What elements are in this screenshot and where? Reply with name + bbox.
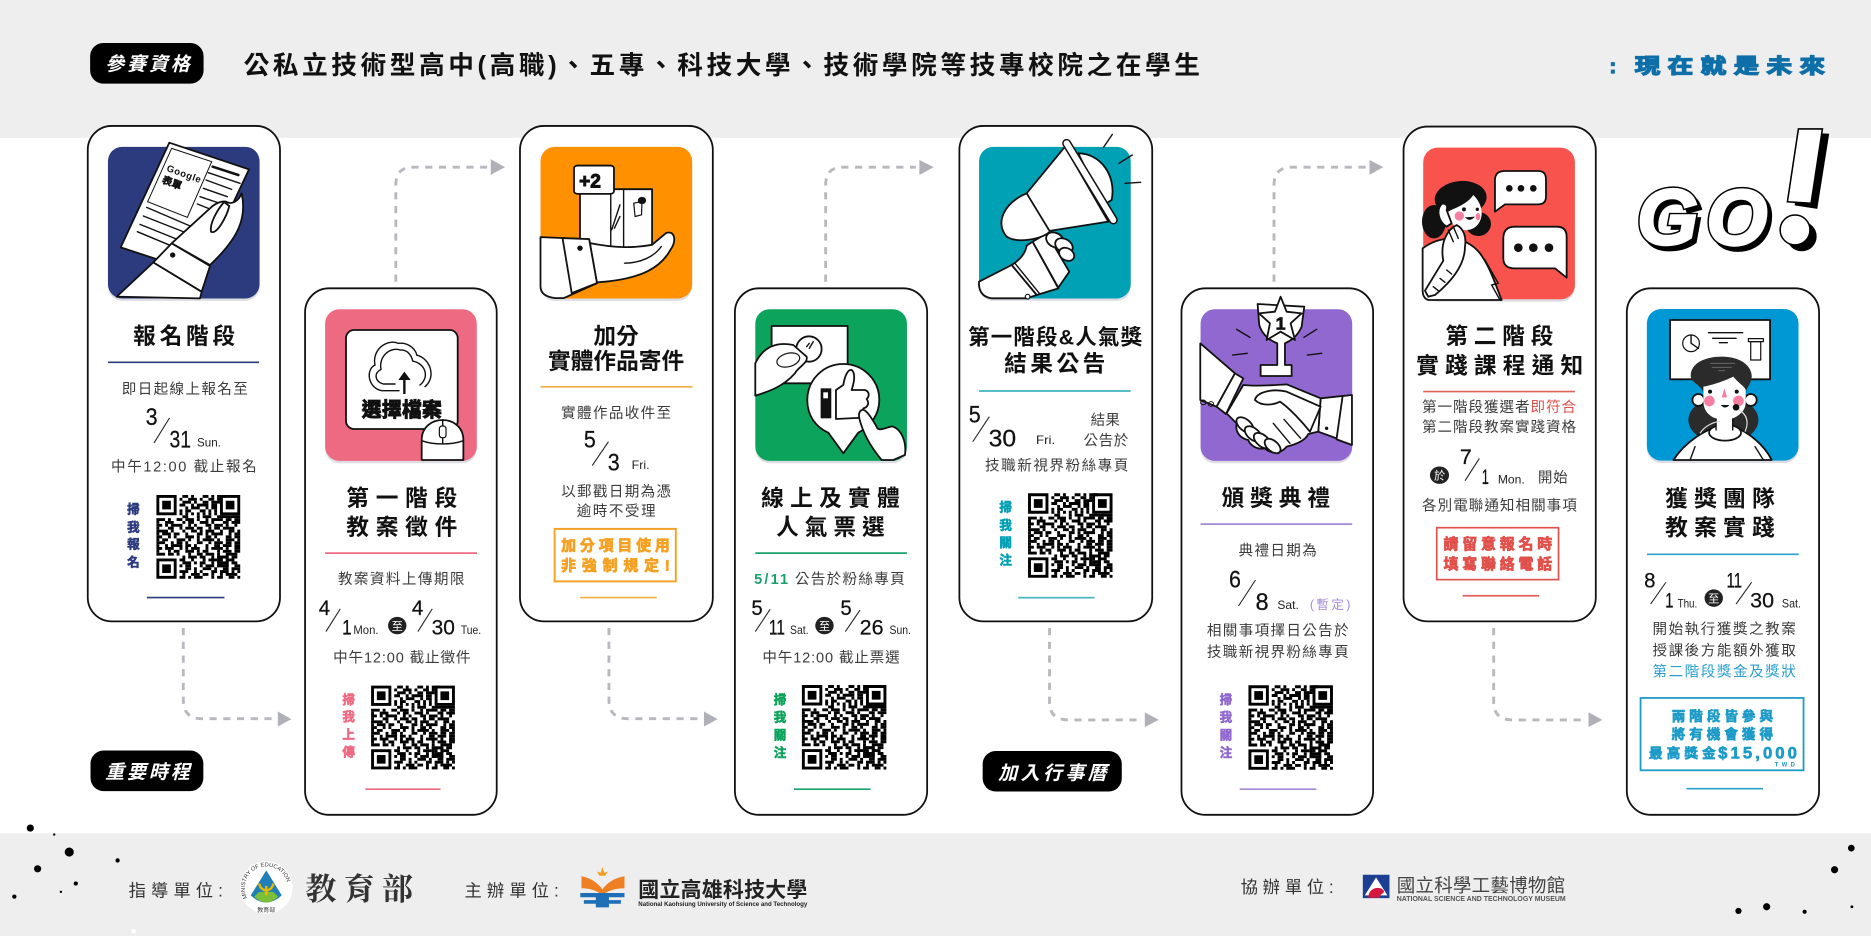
description: 各別電聯通知相關事項 — [1422, 497, 1577, 514]
step title: 報名階段 — [133, 323, 236, 349]
graphic: GO! lettering: O — [1710, 177, 1771, 265]
note: 以郵戳日期為憑 — [561, 484, 671, 501]
icon: hand holding Google form — [108, 143, 260, 301]
date range: 5/11 to 5/26 — [751, 596, 911, 640]
scan me label — [127, 501, 140, 569]
scan me label: 關 — [774, 729, 786, 743]
panel: step 6 award ceremony — [1181, 288, 1373, 815]
date range: 8/1 to 11/30: Thu. — [1678, 597, 1697, 611]
badge: add to calendar: 加入行事曆 — [998, 763, 1111, 785]
graphic: GO! lettering: G — [1637, 174, 1698, 262]
step title — [1416, 323, 1583, 378]
scan me label — [774, 692, 787, 760]
step title: 結果公告 — [1004, 350, 1105, 376]
scan me label: 我 — [342, 710, 355, 724]
note — [1207, 623, 1349, 661]
panel: step 8 winners teaching — [1627, 288, 1819, 815]
description: 即日起線上報名至 — [122, 381, 248, 398]
QR code: follow — [1028, 493, 1113, 578]
logo: Ministry of Education: 教育部 — [257, 906, 275, 914]
date: 7/1: 7 — [1460, 445, 1472, 469]
callout: bonus optional — [555, 529, 676, 581]
icon: hand holding Google form: Google — [165, 163, 202, 186]
card frame — [1404, 127, 1596, 621]
step title: 教案徵件 — [346, 514, 457, 540]
deadline: 中午12:00 截止徵件 — [333, 650, 470, 667]
date: 5/3 — [584, 427, 650, 476]
date range: 5/11 to 5/26: 11 — [769, 616, 785, 640]
date range: 5/11 to 5/26: Sat. — [790, 623, 809, 637]
badge: eligibility: 參賽資格 — [105, 53, 192, 75]
step title: 第一階段&人氣獎 — [968, 324, 1142, 349]
panel: step 4 popularity vote — [735, 288, 927, 815]
footer: advisor label: 指導單位: — [129, 881, 223, 901]
scan me label: 名 — [127, 554, 140, 569]
graphic: GO! lettering — [1637, 129, 1829, 265]
description — [985, 412, 1129, 474]
header band — [0, 0, 1871, 138]
date range: 4/1 to 4/30: 4 — [412, 596, 423, 620]
arrow: step 1 to 2 — [183, 628, 291, 726]
date: 5/30 — [969, 402, 1055, 453]
step title: 第二階段 — [1445, 323, 1554, 349]
QR code: follow — [802, 685, 886, 770]
scan me label — [342, 692, 355, 759]
description: 授課後方能額外獲取 — [1652, 642, 1796, 659]
step title: 線上及實體 — [761, 485, 900, 511]
icon: hand holding parcels +2 — [540, 147, 692, 301]
date range: 8/1 to 11/30: 1 — [1665, 589, 1674, 613]
icon: hand holding Google form: 表單 — [160, 173, 184, 192]
heading: eligibility statement: 公私立技術型高中(高職)、五專、科技大學、技術學院等技專校院之在學生 — [244, 50, 1200, 80]
scan me label: 我 — [127, 520, 140, 534]
date range: 5/11 to 5/26: 26 — [860, 616, 884, 640]
panel: step 2 lesson plan submission — [305, 288, 497, 815]
eligibility note — [1422, 398, 1577, 436]
description: 第二階段獎金及獎狀 — [1652, 662, 1796, 680]
tagline: 現在就是未來 — [1635, 54, 1825, 77]
date: 7/1: 1 — [1482, 465, 1489, 489]
step title: 教案實踐 — [1665, 514, 1775, 540]
date range: 8/1 to 11/30: 11 — [1727, 568, 1742, 592]
badge: add to calendar — [983, 751, 1122, 792]
logo: Ministry of Education: MINISTRY OF EDUCATION — [240, 862, 291, 899]
announcement — [754, 571, 905, 588]
footer: decorative dots right — [1735, 845, 1855, 914]
step title — [968, 324, 1142, 376]
date range: 4/1 to 4/30: 至 — [392, 621, 403, 633]
badge: eligibility — [90, 43, 204, 84]
deadline: 中午12:00 截止票選 — [762, 650, 900, 667]
step title: 頒獎典禮 — [1221, 485, 1330, 511]
scan me label: 掃 — [342, 692, 355, 707]
icon: woman presenter with headset — [1647, 309, 1799, 463]
date range: 8/1 to 11/30: 8 — [1644, 568, 1656, 592]
callout: bonus optional: 非強制規定! — [561, 557, 670, 575]
note: 逾時不受理 — [577, 503, 656, 520]
scan me label: 掃 — [127, 501, 140, 516]
date: 5/30: Fri. — [1036, 433, 1055, 447]
scan me label: 掃 — [774, 692, 786, 707]
date: 6/8: Sat. — [1277, 598, 1299, 612]
date: 7/1: 於 — [1434, 468, 1445, 482]
step title: 加分 — [593, 323, 639, 349]
step title: 人氣票選 — [776, 514, 885, 540]
date range: 4/1 to 4/30: Tue. — [461, 623, 481, 637]
date: 6/8 — [1229, 566, 1350, 616]
panel: step 5 results announcement — [959, 126, 1152, 621]
callout: top prize: TWD — [1775, 762, 1796, 768]
scan me label: 注 — [999, 553, 1012, 568]
QR code: register — [156, 495, 240, 579]
description: 結果 — [1091, 412, 1120, 429]
date: 3/31: 3 — [146, 404, 158, 431]
footer band — [0, 833, 1871, 936]
date: 6/8: 8 — [1255, 589, 1269, 616]
date: 6/8: (暫定) — [1310, 598, 1350, 612]
scan me label — [1220, 692, 1233, 760]
scan me label: 我 — [774, 711, 787, 725]
date range: 4/1 to 4/30: 1 — [342, 616, 352, 640]
date range: 5/11 to 5/26: 5 — [751, 596, 763, 620]
description — [1652, 621, 1796, 680]
panel: step 1 registration — [88, 126, 280, 621]
description: 公告於 — [1084, 432, 1129, 449]
callout: top prize — [1641, 698, 1804, 770]
description: 實體作品收件至 — [561, 404, 671, 422]
date range: 8/1 to 11/30: 30 — [1750, 589, 1774, 613]
date: 5/30: 5 — [969, 402, 981, 429]
scan me label: 掃 — [1220, 692, 1232, 707]
description: 開始執行獲獎之教案 — [1652, 621, 1796, 638]
date: 5/3: 5 — [584, 427, 596, 454]
badge: important dates: 重要時程 — [105, 761, 193, 783]
step title: 實踐課程通知 — [1416, 352, 1583, 378]
graphic: GO! lettering: O — [1706, 174, 1768, 262]
arrow: step 5 to 6 — [1050, 628, 1159, 727]
description: 技職新視界粉絲專頁 — [985, 457, 1128, 474]
date: 7/1 — [1430, 445, 1568, 489]
step title: 第一階段 — [346, 485, 458, 511]
QR code: upload — [371, 686, 455, 769]
scan me label: 我 — [999, 518, 1012, 532]
note: 相關事項擇日公告於 — [1207, 623, 1349, 640]
callout: phone number reminder: 填寫聯絡電話 — [1444, 555, 1552, 573]
logo text: museum: 國立科學工藝博物館 — [1397, 875, 1565, 896]
scan me label: 關 — [999, 536, 1012, 550]
scan me label: 我 — [1220, 711, 1233, 725]
date: 5/3: 3 — [608, 449, 620, 476]
icon: trophy and handshake: 1 — [1276, 314, 1286, 334]
arrow: step 4 to 5 — [826, 160, 934, 282]
icon: upload file window: 選擇檔案 — [362, 399, 442, 422]
deadline: 中午12:00 截止報名 — [111, 459, 257, 476]
note: 技職新視界粉絲專頁 — [1207, 644, 1349, 661]
callout: bonus optional: 加分項目使用 — [561, 536, 670, 554]
icon: hands and thumbs up — [755, 309, 907, 463]
date: 3/31: Sun. — [197, 436, 221, 450]
logo: National Science and Technology Museum — [1363, 875, 1389, 898]
card frame — [305, 288, 497, 815]
logo: Ministry of Education — [240, 862, 292, 914]
scan me label: 注 — [1220, 745, 1233, 760]
date: 7/1: Mon. — [1498, 473, 1525, 487]
eligibility note: 第一階段獲選者即符合 — [1422, 398, 1577, 416]
scan me label: 關 — [1220, 729, 1232, 743]
date: 3/31: 31 — [170, 427, 191, 454]
logo text: NKUST: 國立高雄科技大學 — [638, 878, 807, 902]
date range: 5/11 to 5/26: 至 — [819, 621, 830, 633]
step title — [1665, 486, 1775, 540]
scan me label — [999, 500, 1012, 568]
footer: decorative dots left — [12, 824, 136, 934]
step title: 實體作品寄件 — [548, 348, 684, 374]
panel: step 7 second stage notice — [1404, 127, 1596, 621]
date: 7/1: 開始 — [1538, 469, 1568, 486]
announcement: 5/11 — [754, 572, 788, 588]
icon: trophy and handshake — [1200, 297, 1352, 463]
logo: NKUST — [580, 867, 624, 907]
date range: 4/1 to 4/30: 4 — [319, 596, 330, 620]
announcement: 公告於粉絲專頁 — [795, 571, 905, 588]
date: 5/30: 30 — [989, 426, 1016, 453]
card frame — [735, 288, 927, 815]
description: 典禮日期為 — [1239, 543, 1317, 560]
date range: 4/1 to 4/30: 30 — [432, 616, 455, 640]
callout: top prize: $15,000 — [1718, 744, 1797, 763]
panel: step 3 bonus physical work — [520, 126, 713, 621]
arrow: step 7 to 8 — [1494, 628, 1602, 727]
date range: 8/1 to 11/30: 至 — [1708, 593, 1719, 605]
scan me label: 注 — [774, 745, 787, 760]
scan me label: 上 — [342, 728, 355, 742]
scan me label: 掃 — [999, 500, 1012, 515]
note — [561, 484, 671, 520]
logo text: museum: NATIONAL SCIENCE AND TECHNOLOGY MUSEUM — [1397, 894, 1566, 903]
date range: 4/1 to 4/30 — [319, 596, 481, 640]
step title — [761, 485, 900, 540]
card frame — [520, 126, 713, 621]
step title — [548, 323, 684, 374]
date range: 4/1 to 4/30: Mon. — [353, 623, 378, 637]
callout: phone number reminder: 請留意報名時 — [1444, 535, 1552, 553]
description: 教案資料上傳期限 — [338, 571, 465, 588]
card frame — [1181, 288, 1373, 815]
icon: woman on the phone — [1422, 148, 1575, 302]
callout: top prize: 將有機會獲得 — [1672, 726, 1773, 742]
date: 6/8: 6 — [1229, 566, 1241, 593]
logo text: Ministry of Education: 教育部 — [305, 872, 413, 907]
arrow: step 3 to 4 — [609, 628, 718, 726]
card frame — [88, 126, 280, 621]
QR code: follow — [1248, 685, 1333, 770]
arrow: step 6 to 7 — [1274, 160, 1383, 282]
eligibility note: 第二階段教案實踐資格 — [1422, 418, 1577, 436]
scan me label: 報 — [127, 537, 140, 552]
tagline: : — [1610, 56, 1616, 78]
footer: organizer label: 主辦單位: — [464, 881, 559, 901]
card frame — [959, 126, 1152, 621]
date range: 8/1 to 11/30 — [1644, 568, 1801, 613]
icon: megaphone — [979, 134, 1141, 301]
graphic: GO! lettering: G — [1637, 174, 1698, 262]
icon: hand holding parcels +2: +2 — [579, 171, 601, 192]
callout: top prize: 最高獎金 — [1649, 745, 1716, 761]
date range: 5/11 to 5/26: Sun. — [890, 623, 911, 637]
icon: upload file window — [325, 309, 477, 463]
callout: phone number reminder — [1437, 528, 1559, 580]
footer: co-organizer label: 協辦單位: — [1241, 877, 1334, 897]
arrow: step 2 to 3 — [396, 159, 505, 282]
logo text: NKUST: National Kaohsiung University of Science and Technology — [638, 901, 808, 908]
date: 3/31 — [146, 404, 221, 454]
step title — [346, 485, 458, 540]
badge: important dates — [91, 750, 203, 791]
card frame — [1627, 288, 1819, 815]
date: 5/3: Fri. — [632, 458, 650, 472]
graphic: GO! lettering: G — [1641, 177, 1702, 265]
date range: 8/1 to 11/30: Sat. — [1782, 597, 1801, 611]
step title: 獲獎團隊 — [1665, 486, 1775, 512]
callout: top prize: 兩階段皆參與 — [1672, 708, 1773, 724]
date range: 5/11 to 5/26: 5 — [840, 596, 852, 620]
graphic: GO! lettering: O — [1706, 174, 1768, 262]
scan me label: 傳 — [342, 745, 355, 759]
